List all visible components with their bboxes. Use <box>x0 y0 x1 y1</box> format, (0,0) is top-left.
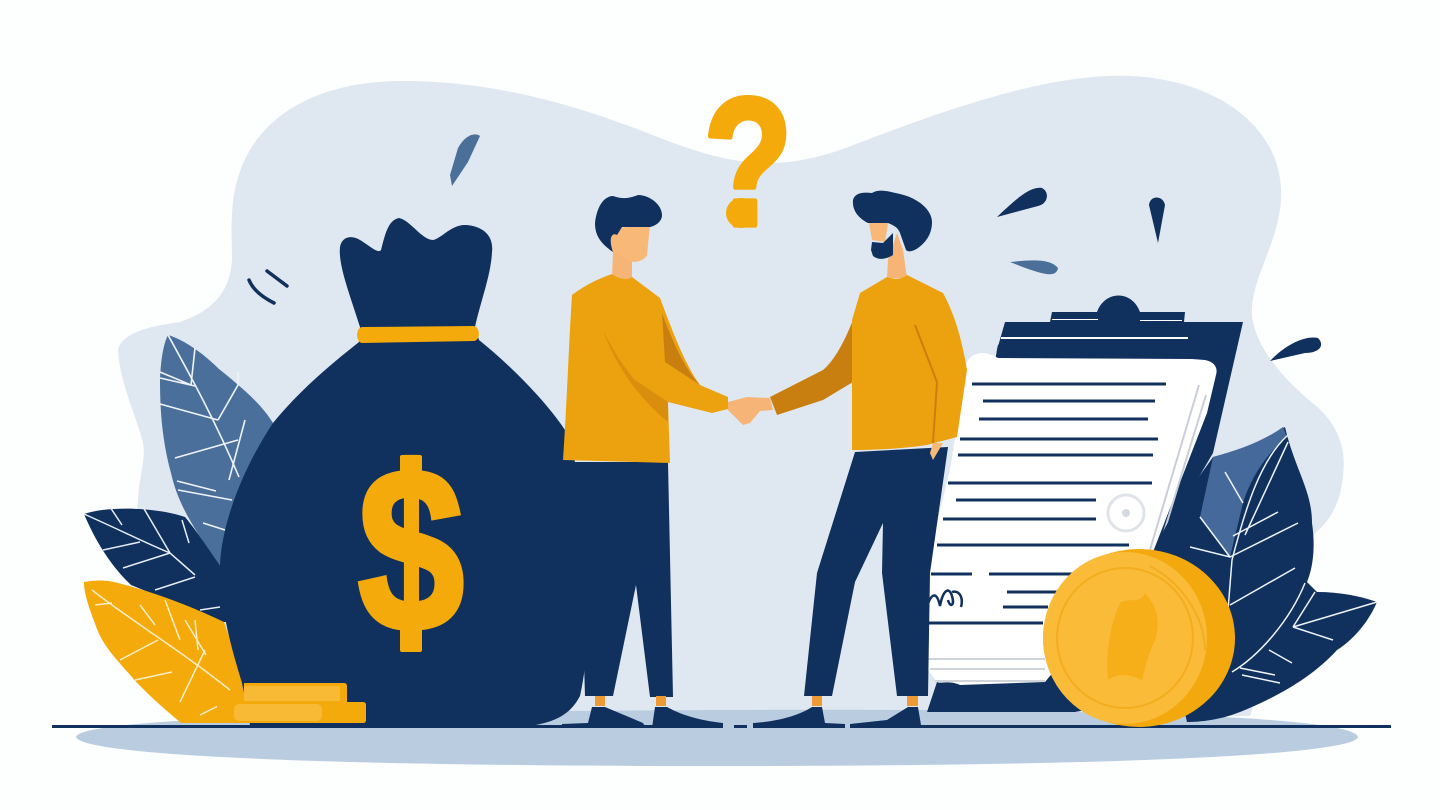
person right <box>753 191 967 728</box>
right person arm <box>770 320 853 415</box>
leaf: upper left blue <box>160 335 273 565</box>
question mark: ? <box>703 61 793 265</box>
bag tie <box>357 326 479 343</box>
accent marks <box>249 134 1321 361</box>
gold coin stack <box>217 683 366 723</box>
right person beard <box>871 233 893 259</box>
right person ankles <box>812 696 918 706</box>
gold coin <box>1043 549 1235 727</box>
left person neck <box>612 250 632 280</box>
signature <box>927 591 962 607</box>
right person legs <box>804 447 948 696</box>
left person face <box>608 225 650 262</box>
right person face <box>869 223 888 242</box>
left person legs <box>575 462 673 697</box>
left person hair <box>595 195 662 252</box>
right person hair <box>853 191 932 251</box>
contract paper <box>928 353 1217 685</box>
left person ankles <box>595 696 666 706</box>
right person shoes <box>753 707 921 728</box>
right person neck <box>887 233 907 278</box>
ground shadow ellipse <box>76 710 1358 766</box>
leaf: middle left navy <box>84 507 235 622</box>
ground line <box>52 725 1391 728</box>
leaf: lower left gold <box>84 580 249 723</box>
gray page edges <box>928 659 1045 681</box>
seal stamp <box>1108 495 1144 531</box>
leaf: right navy with lower leaf <box>1150 427 1377 722</box>
right person torso <box>852 275 967 450</box>
person left <box>562 195 728 728</box>
background blob <box>118 76 1344 716</box>
left person torso <box>563 274 728 463</box>
handshake <box>728 397 773 425</box>
left person shoes <box>562 707 723 728</box>
money bag <box>220 218 588 727</box>
dollar sign: $ <box>358 420 464 679</box>
clipboard contract <box>927 296 1243 712</box>
contract text lines <box>927 384 1166 623</box>
